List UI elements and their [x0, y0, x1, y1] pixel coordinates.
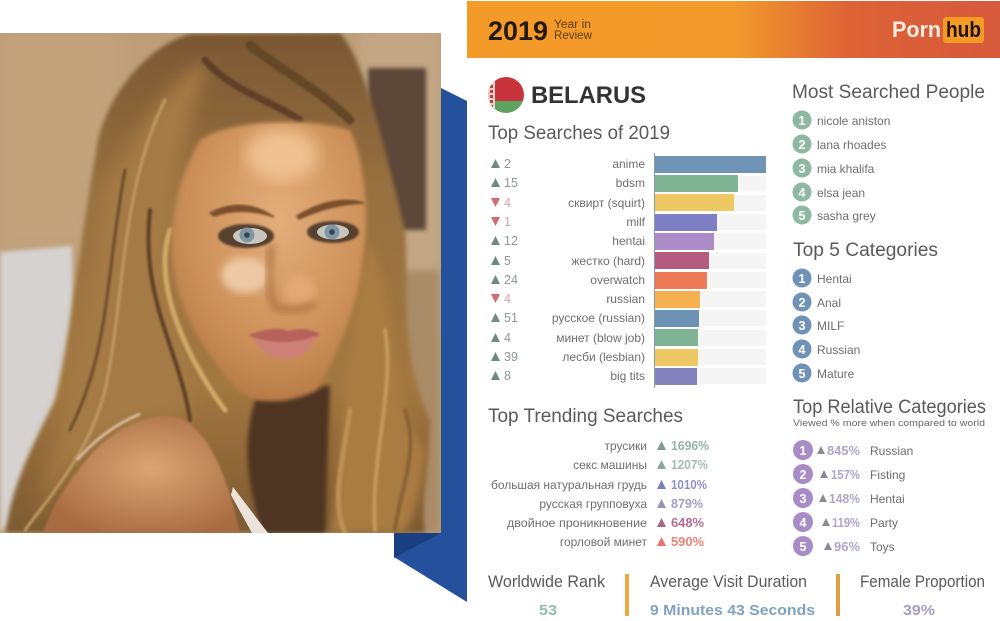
list: top relative categories: Russian [870, 444, 913, 458]
list: top relative categories: 148% [829, 492, 860, 506]
list: top relative categories: 5 [800, 540, 807, 554]
rank change indicators: 4 [504, 331, 511, 345]
search terms labels: milf [626, 215, 646, 229]
trending searches list: 648% [671, 516, 704, 530]
list: top 5 categories: 1 [799, 272, 806, 286]
stat: female proportion: Female Proportion [860, 573, 985, 591]
trending searches list: 1207% [671, 458, 708, 472]
search terms labels: жестко (hard) [571, 254, 645, 268]
stat: average visit duration: 9 Minutes 43 Seconds [650, 602, 815, 619]
trending searches list: 1696% [671, 439, 709, 453]
search terms labels: big tits [610, 369, 645, 383]
brand logo: Porn [892, 17, 941, 42]
list: top relative categories: 1 [800, 444, 807, 458]
trending searches list: 590% [671, 535, 704, 549]
country heading with flag: BELARUS [531, 82, 646, 109]
search terms labels: hentai [612, 234, 645, 248]
rank change indicators: 24 [504, 273, 518, 287]
stat: worldwide rank: Worldwide Rank [488, 573, 606, 591]
rank change indicators: 12 [504, 234, 518, 248]
rank change indicators: 39 [504, 350, 518, 364]
list: top relative categories [793, 440, 913, 556]
list: most searched people: lana rhoades [817, 138, 886, 152]
list: top relative categories: 3 [800, 492, 807, 506]
header band [467, 1, 1000, 58]
list: top 5 categories: Hentai [817, 272, 852, 286]
list: most searched people: 5 [799, 209, 806, 223]
list: most searched people: 3 [799, 162, 806, 176]
list: top 5 categories: Mature [817, 367, 855, 381]
rank change indicators: 15 [504, 176, 518, 190]
list: top relative categories: Fisting [870, 468, 905, 482]
country heading with flag [488, 77, 646, 113]
rank change indicators: 51 [504, 311, 518, 325]
trending searches list: русская групповуха [539, 497, 647, 511]
list: top relative categories: 96% [834, 540, 860, 554]
search terms labels: bdsm [616, 176, 645, 190]
search terms labels: russian [606, 292, 645, 306]
rank change indicators: 4 [504, 292, 511, 306]
list: top relative categories: 157% [831, 468, 860, 482]
list: top relative categories: 4 [800, 516, 807, 530]
search terms labels: сквирт (squirt) [568, 196, 645, 210]
search terms labels: лесби (lesbian) [562, 350, 645, 364]
blue ribbon shape [394, 88, 467, 602]
list: most searched people: 2 [799, 138, 806, 152]
search terms labels: overwatch [590, 273, 645, 287]
list: top 5 categories: 4 [799, 343, 806, 357]
trending searches list: большая натуральная грудь [491, 478, 647, 492]
divider [836, 574, 840, 616]
rank change indicators: 5 [504, 254, 511, 268]
heading: top trending searches: Top Trending Searches [488, 406, 683, 427]
trending searches list: трусики [604, 439, 647, 453]
list: top relative categories: Toys [870, 540, 895, 554]
portrait photo [0, 33, 441, 533]
year in review: Review [554, 30, 593, 42]
year in review [554, 19, 593, 42]
rank change indicators [491, 157, 518, 383]
stat: female proportion: 39% [903, 602, 935, 619]
year: 2019 [488, 16, 548, 46]
stat: average visit duration: Average Visit Duration [650, 573, 807, 591]
search terms labels: минет (blow job) [556, 331, 645, 345]
trending searches list: двойное проникновение [507, 516, 647, 530]
rank change indicators: 8 [504, 369, 511, 383]
stat: worldwide rank [488, 573, 606, 619]
list: top 5 categories [792, 268, 860, 382]
heading: top relative categories: Top Relative Categories [793, 397, 986, 418]
bar chart: top searches [654, 153, 766, 388]
list: most searched people: sasha grey [817, 209, 876, 223]
year in review: Year in [554, 19, 591, 31]
list: top 5 categories: 5 [799, 367, 806, 381]
list: most searched people: elsa jean [817, 186, 865, 200]
trending searches list: горловой минет [560, 535, 647, 549]
rank change indicators: 2 [504, 157, 511, 171]
note: viewed more: Viewed % more when compared to world [793, 418, 985, 429]
list: top relative categories: Hentai [870, 492, 905, 506]
list: top 5 categories: Russian [817, 343, 860, 357]
list: most searched people: mia khalifa [817, 162, 875, 176]
list: top relative categories: 2 [800, 468, 807, 482]
list: top relative categories: Party [870, 516, 898, 530]
stat: average visit duration [650, 573, 815, 619]
search terms labels: anime [612, 157, 645, 171]
list: top 5 categories: Anal [817, 296, 841, 310]
list: top 5 categories: 2 [799, 296, 806, 310]
trending searches list: 879% [671, 497, 703, 511]
search terms labels: русское (russian) [552, 311, 645, 325]
list: most searched people: nicole aniston [817, 114, 890, 128]
rank change indicators: 1 [504, 215, 511, 229]
trending searches list: секс машины [573, 458, 647, 472]
list: top relative categories: 845% [827, 444, 860, 458]
heading: most searched people: Most Searched People [792, 82, 985, 103]
list: top relative categories: 119% [832, 516, 860, 530]
list: top 5 categories: MILF [817, 319, 844, 333]
heading: top 5 categories: Top 5 Categories [793, 240, 938, 261]
brand logo [892, 17, 984, 43]
trending searches list: 1010% [671, 478, 707, 492]
list: most searched people [792, 110, 890, 224]
heading: top searches: Top Searches of 2019 [488, 123, 670, 144]
list: most searched people: 1 [799, 114, 806, 128]
trending searches list [491, 439, 709, 549]
stat: female proportion [860, 573, 985, 619]
divider [625, 574, 629, 616]
stat: worldwide rank: 53 [539, 602, 557, 619]
search terms labels [552, 157, 646, 383]
rank change indicators: 4 [504, 196, 511, 210]
brand logo: hub [946, 17, 981, 42]
list: top 5 categories: 3 [799, 319, 806, 333]
list: most searched people: 4 [799, 186, 806, 200]
